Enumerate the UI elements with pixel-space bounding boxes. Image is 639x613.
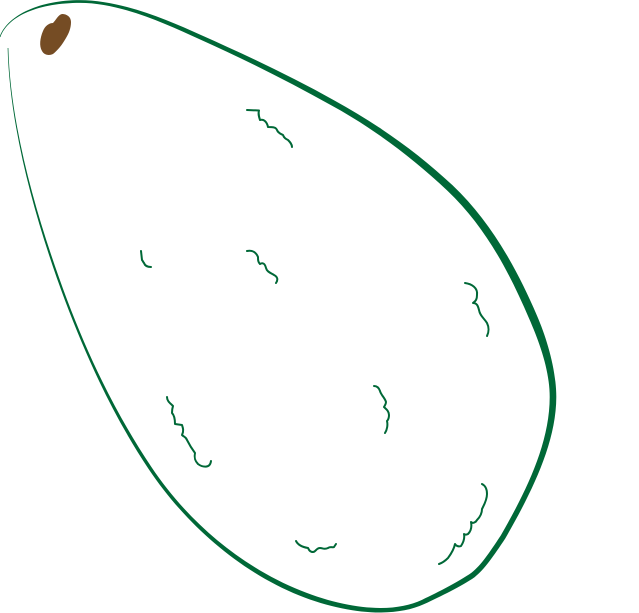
icon: brown stem scar [40, 14, 71, 55]
skin speckle marks [141, 110, 488, 564]
speckle: centre right [374, 386, 389, 433]
speckle: middle [247, 251, 277, 283]
speckle: right [465, 283, 488, 336]
speckle: lower right [439, 484, 487, 564]
speckle: small left [141, 251, 151, 267]
speckle: upper centre [247, 110, 292, 147]
speckle: bottom centre [296, 541, 336, 552]
speckle: lower left [167, 397, 211, 467]
